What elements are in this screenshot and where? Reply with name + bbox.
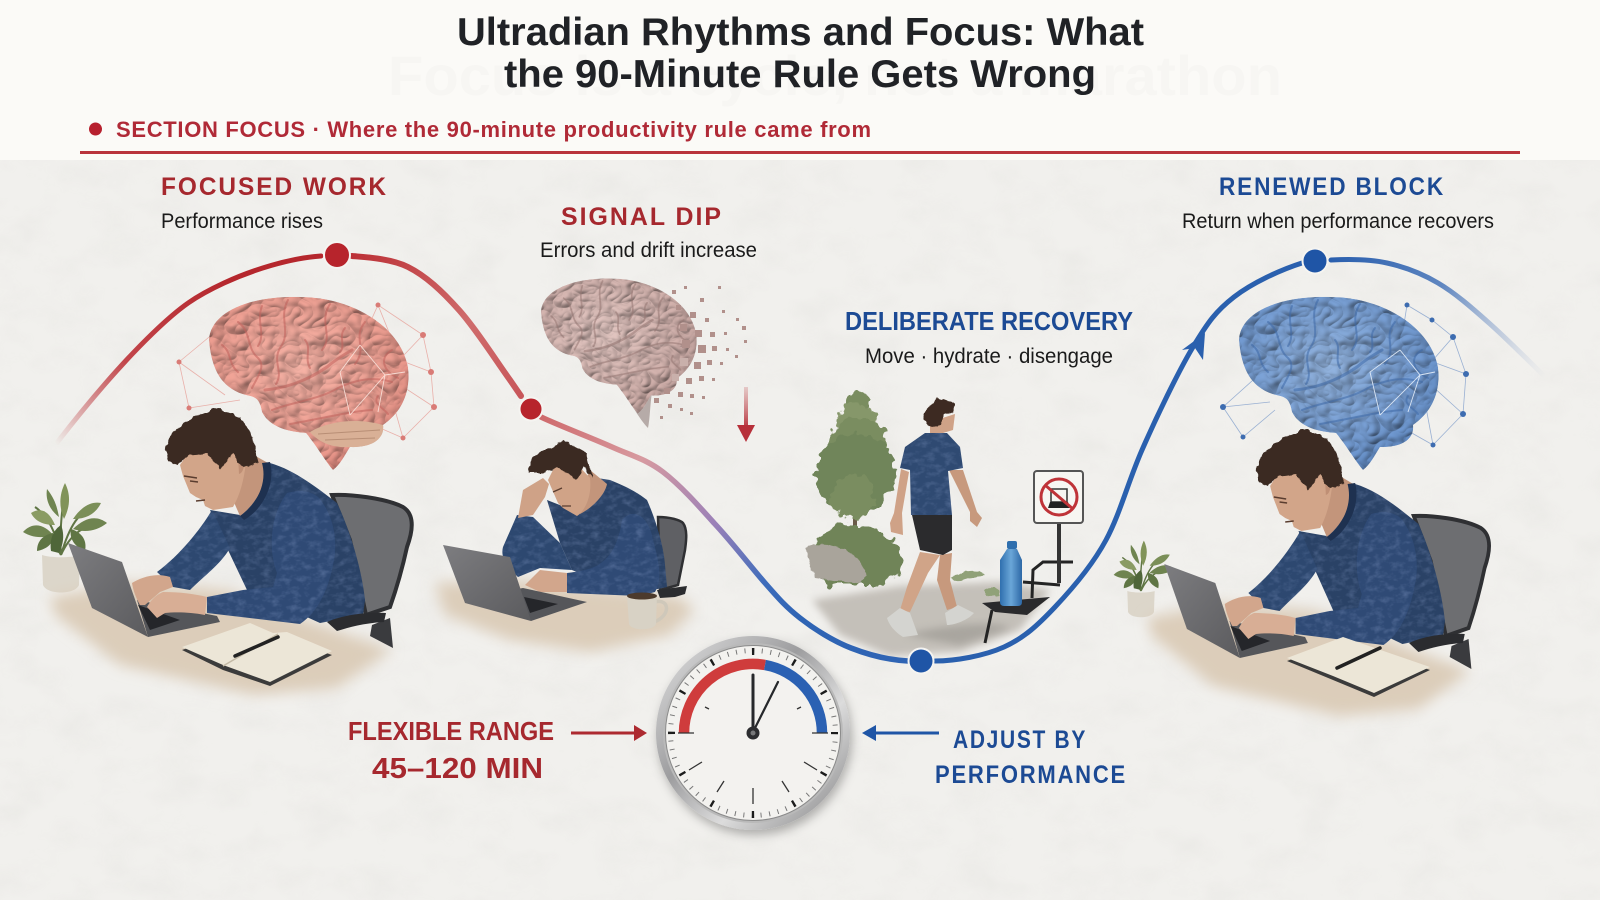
- icon: tree: [805, 391, 1000, 597]
- arrow head on curve: [1182, 333, 1205, 360]
- callout: adjust by performance: [935, 726, 1127, 789]
- recovery scene: [805, 391, 1083, 656]
- person: signal dip: [435, 440, 694, 652]
- brain: focused: [176, 297, 437, 470]
- icon: water bottle: [1000, 541, 1022, 606]
- chair: [658, 517, 686, 590]
- title: Ultradian Rhythms and Focus: What: [457, 11, 1144, 54]
- icon: coffee mug: [627, 592, 666, 629]
- stage label: deliberate recovery: [845, 306, 1133, 368]
- head: [930, 414, 955, 433]
- stage label: renewed block: Return when performance recovers: [1182, 210, 1494, 233]
- title: [457, 11, 1144, 96]
- arrow: red to clock: [571, 725, 647, 741]
- icon: desk plant: [23, 483, 107, 592]
- network nodes: [179, 305, 434, 438]
- stage label: focused work: FOCUSED WORK: [161, 173, 388, 201]
- stage label: renewed block: [1182, 173, 1494, 233]
- curve markers: [324, 242, 1328, 674]
- no-laptop sign: [1034, 471, 1083, 583]
- clock gauge: [656, 636, 850, 830]
- hair: [528, 440, 593, 480]
- ghost headline: Focus is a cycle, not a marathon: [388, 44, 1282, 107]
- network nodes: [1223, 305, 1466, 445]
- stage label: renewed block: RENEWED BLOCK: [1219, 173, 1445, 201]
- shorts: [912, 515, 952, 555]
- stage label: deliberate recovery: Move · hydrate · disengage: [865, 345, 1113, 368]
- segment: recovery climb: [935, 263, 1302, 661]
- shirt: [900, 433, 963, 515]
- bench: [982, 562, 1073, 643]
- callout: adjust by performance: PERFORMANCE: [935, 761, 1127, 789]
- stage label: signal dip: Errors and drift increase: [540, 239, 757, 262]
- callout: flexible range: 45–120 MIN: [372, 753, 543, 785]
- stage label: focused work: [161, 173, 388, 233]
- hand at head: [518, 478, 549, 518]
- stage label: signal dip: SIGNAL DIP: [561, 203, 723, 231]
- person: renewed block: [1114, 429, 1489, 716]
- armrest: [657, 586, 687, 598]
- neck: [575, 470, 607, 514]
- title: the 90-Minute Rule Gets Wrong: [504, 53, 1096, 96]
- callout: flexible range: [348, 716, 554, 785]
- person: focused work: [23, 408, 412, 695]
- face: [548, 462, 590, 516]
- inner tick marks: [678, 707, 828, 804]
- lower hand: [525, 570, 567, 592]
- blue arc: adjust by performance: [765, 665, 822, 733]
- header band: [0, 0, 1600, 160]
- notebook: [1287, 637, 1430, 697]
- brain: renewed: [1220, 297, 1469, 470]
- arrow: signal dip downward: [737, 387, 755, 442]
- torso: [502, 478, 667, 595]
- far leg: [937, 553, 957, 610]
- callout: adjust by performance: ADJUST BY: [953, 726, 1087, 754]
- walking figure: [887, 398, 982, 637]
- minute ticks: [670, 650, 836, 816]
- segment: decline: [352, 256, 521, 396]
- segment: focused rise: [56, 256, 321, 444]
- dissolving pixels: [654, 286, 747, 419]
- hour ticks: [672, 652, 834, 814]
- brain: signal dip: [541, 279, 747, 428]
- arms: [890, 469, 909, 535]
- stage label: focused work: Performance rises: [161, 210, 323, 233]
- notebook: [182, 623, 332, 686]
- callout: flexible range: FLEXIBLE RANGE: [348, 716, 554, 746]
- segment: renewed fade: [1331, 259, 1545, 377]
- clock hands: [753, 675, 778, 730]
- stage label: signal dip: [540, 203, 757, 262]
- stage label: deliberate recovery: DELIBERATE RECOVERY: [845, 306, 1133, 336]
- near arm: [567, 514, 659, 596]
- icon: desk plant: [1114, 541, 1174, 617]
- desk: [435, 580, 694, 652]
- performance curve: [56, 256, 1545, 661]
- arrow: blue to clock: [862, 725, 939, 741]
- segment: transition to recovery: [541, 417, 908, 661]
- section focus label: SECTION FOCUS · Where the 90-minute productivity rule came from: [116, 117, 871, 142]
- laptop: [512, 588, 587, 621]
- ground: [812, 582, 1050, 656]
- near leg: [900, 552, 940, 612]
- red arc: flexible range: [684, 664, 765, 733]
